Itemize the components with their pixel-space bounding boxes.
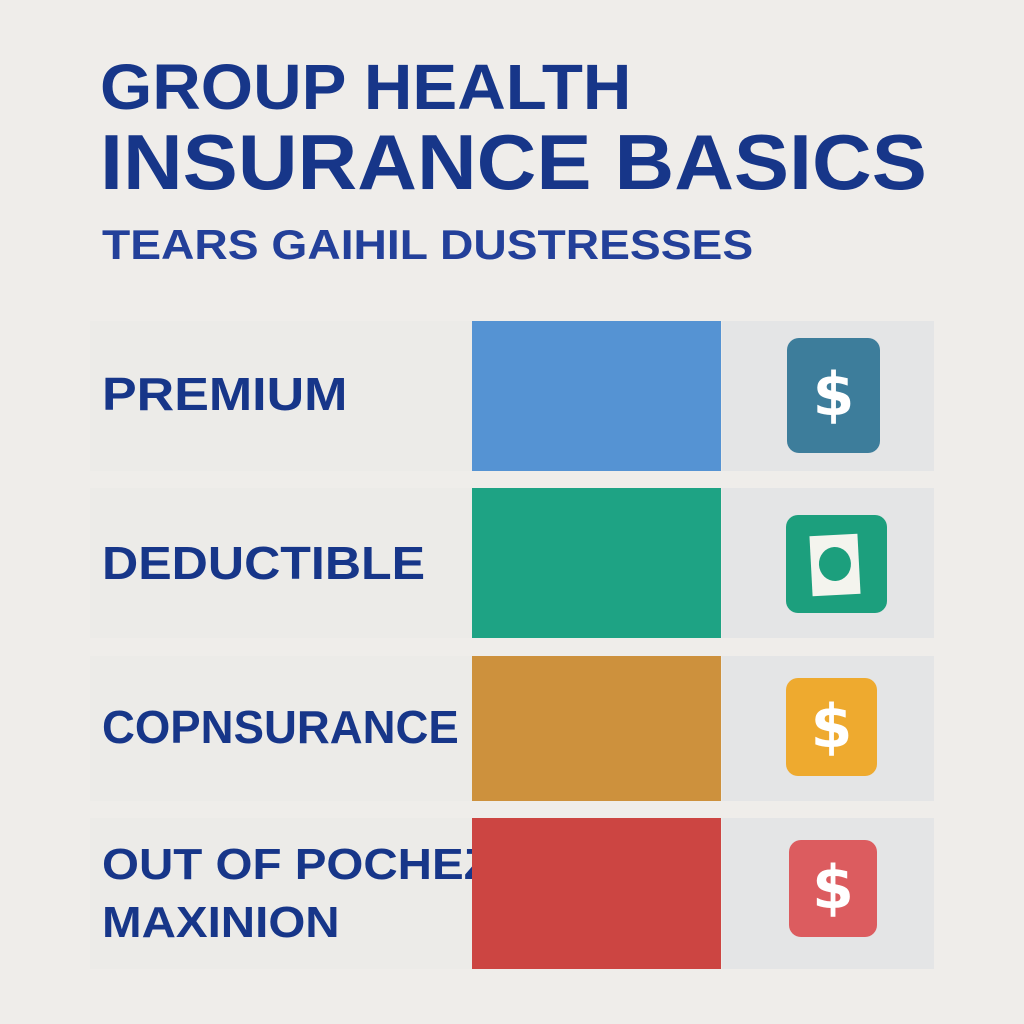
icon: dollar — [787, 338, 880, 453]
label: out of pocket maximum — [102, 840, 493, 947]
title: GROUP HEALTH — [100, 51, 631, 123]
icon: dollar — [789, 840, 877, 937]
row: out of pocket — [102, 818, 934, 969]
color block blue — [472, 321, 721, 471]
title line 2: INSURANCE BASICS — [100, 118, 927, 206]
color block green — [472, 488, 721, 638]
icon: dollar — [786, 678, 877, 776]
icon: bill — [786, 515, 887, 613]
row: premium — [102, 321, 934, 471]
subtitle: TEARS GAIHIL DUSTRESSES — [102, 221, 753, 268]
label: coinsurance: COPNSURANCE — [102, 701, 459, 753]
label: out of pocket maximum: OUT OF POCHEZ — [102, 840, 493, 889]
icon: dollar: $ — [812, 853, 854, 923]
color block red — [472, 818, 721, 969]
color block ochre — [472, 656, 721, 801]
icon: dollar: $ — [811, 692, 852, 762]
label: premium: PREMIUM — [102, 368, 347, 420]
row: deductible — [102, 488, 934, 638]
row: coinsurance — [102, 656, 934, 801]
icon: dollar: $ — [813, 360, 854, 430]
label: deductible: DEDUCTIBLE — [102, 537, 425, 589]
label: out of pocket maximum: MAXINION — [102, 898, 340, 947]
